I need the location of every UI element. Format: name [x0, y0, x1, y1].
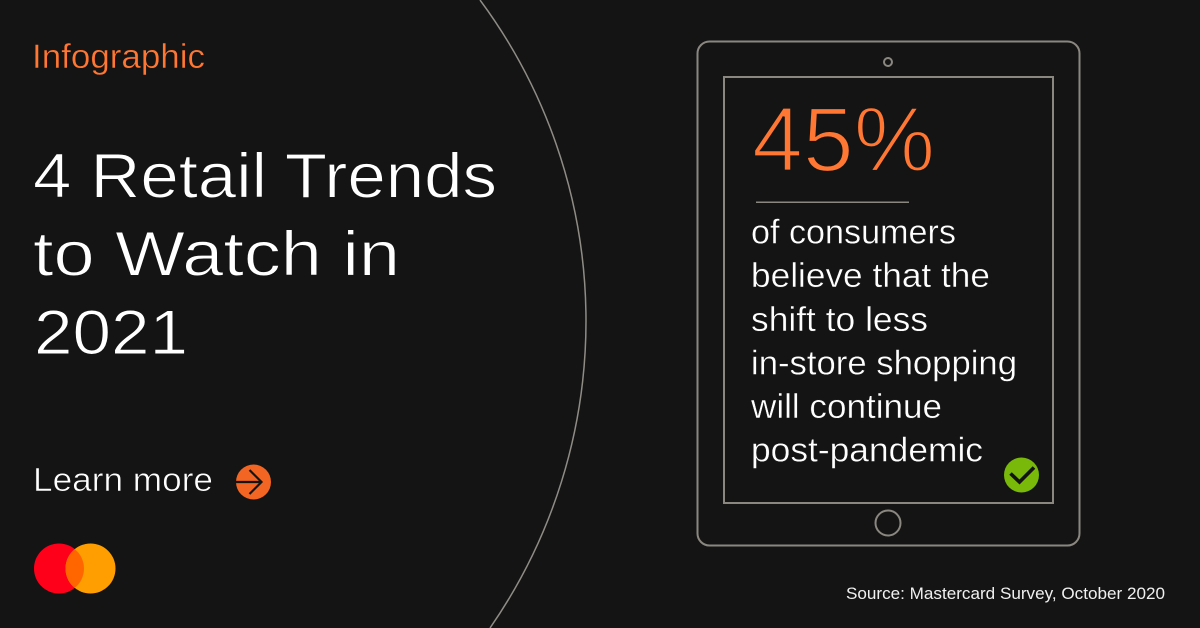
statistic description: in-store shopping [751, 344, 1017, 382]
statistic description: post-pandemic [751, 432, 983, 470]
icon: green check [1004, 458, 1039, 492]
statistic description [750, 214, 1017, 470]
title [33, 142, 497, 368]
source note: Source: Mastercard Survey, October 2020 [846, 584, 1165, 603]
statistic description: believe that the [751, 257, 990, 295]
title: 2021 [34, 298, 188, 368]
call to action: learn more [33, 461, 271, 500]
logo: Mastercard circles [34, 544, 116, 594]
title: to Watch in [33, 220, 400, 290]
title: 4 Retail Trends [33, 142, 497, 212]
statistic: 45%: 45% [752, 89, 935, 191]
statistic description: of consumers [751, 214, 956, 252]
statistic description: shift to less [751, 301, 928, 339]
statistic description: will continue [750, 388, 942, 426]
call to action: learn more: Learn more [33, 461, 213, 498]
label: Infographic: Infographic [32, 38, 205, 76]
tablet illustration [698, 42, 1080, 546]
icon: arrow button [236, 464, 271, 500]
